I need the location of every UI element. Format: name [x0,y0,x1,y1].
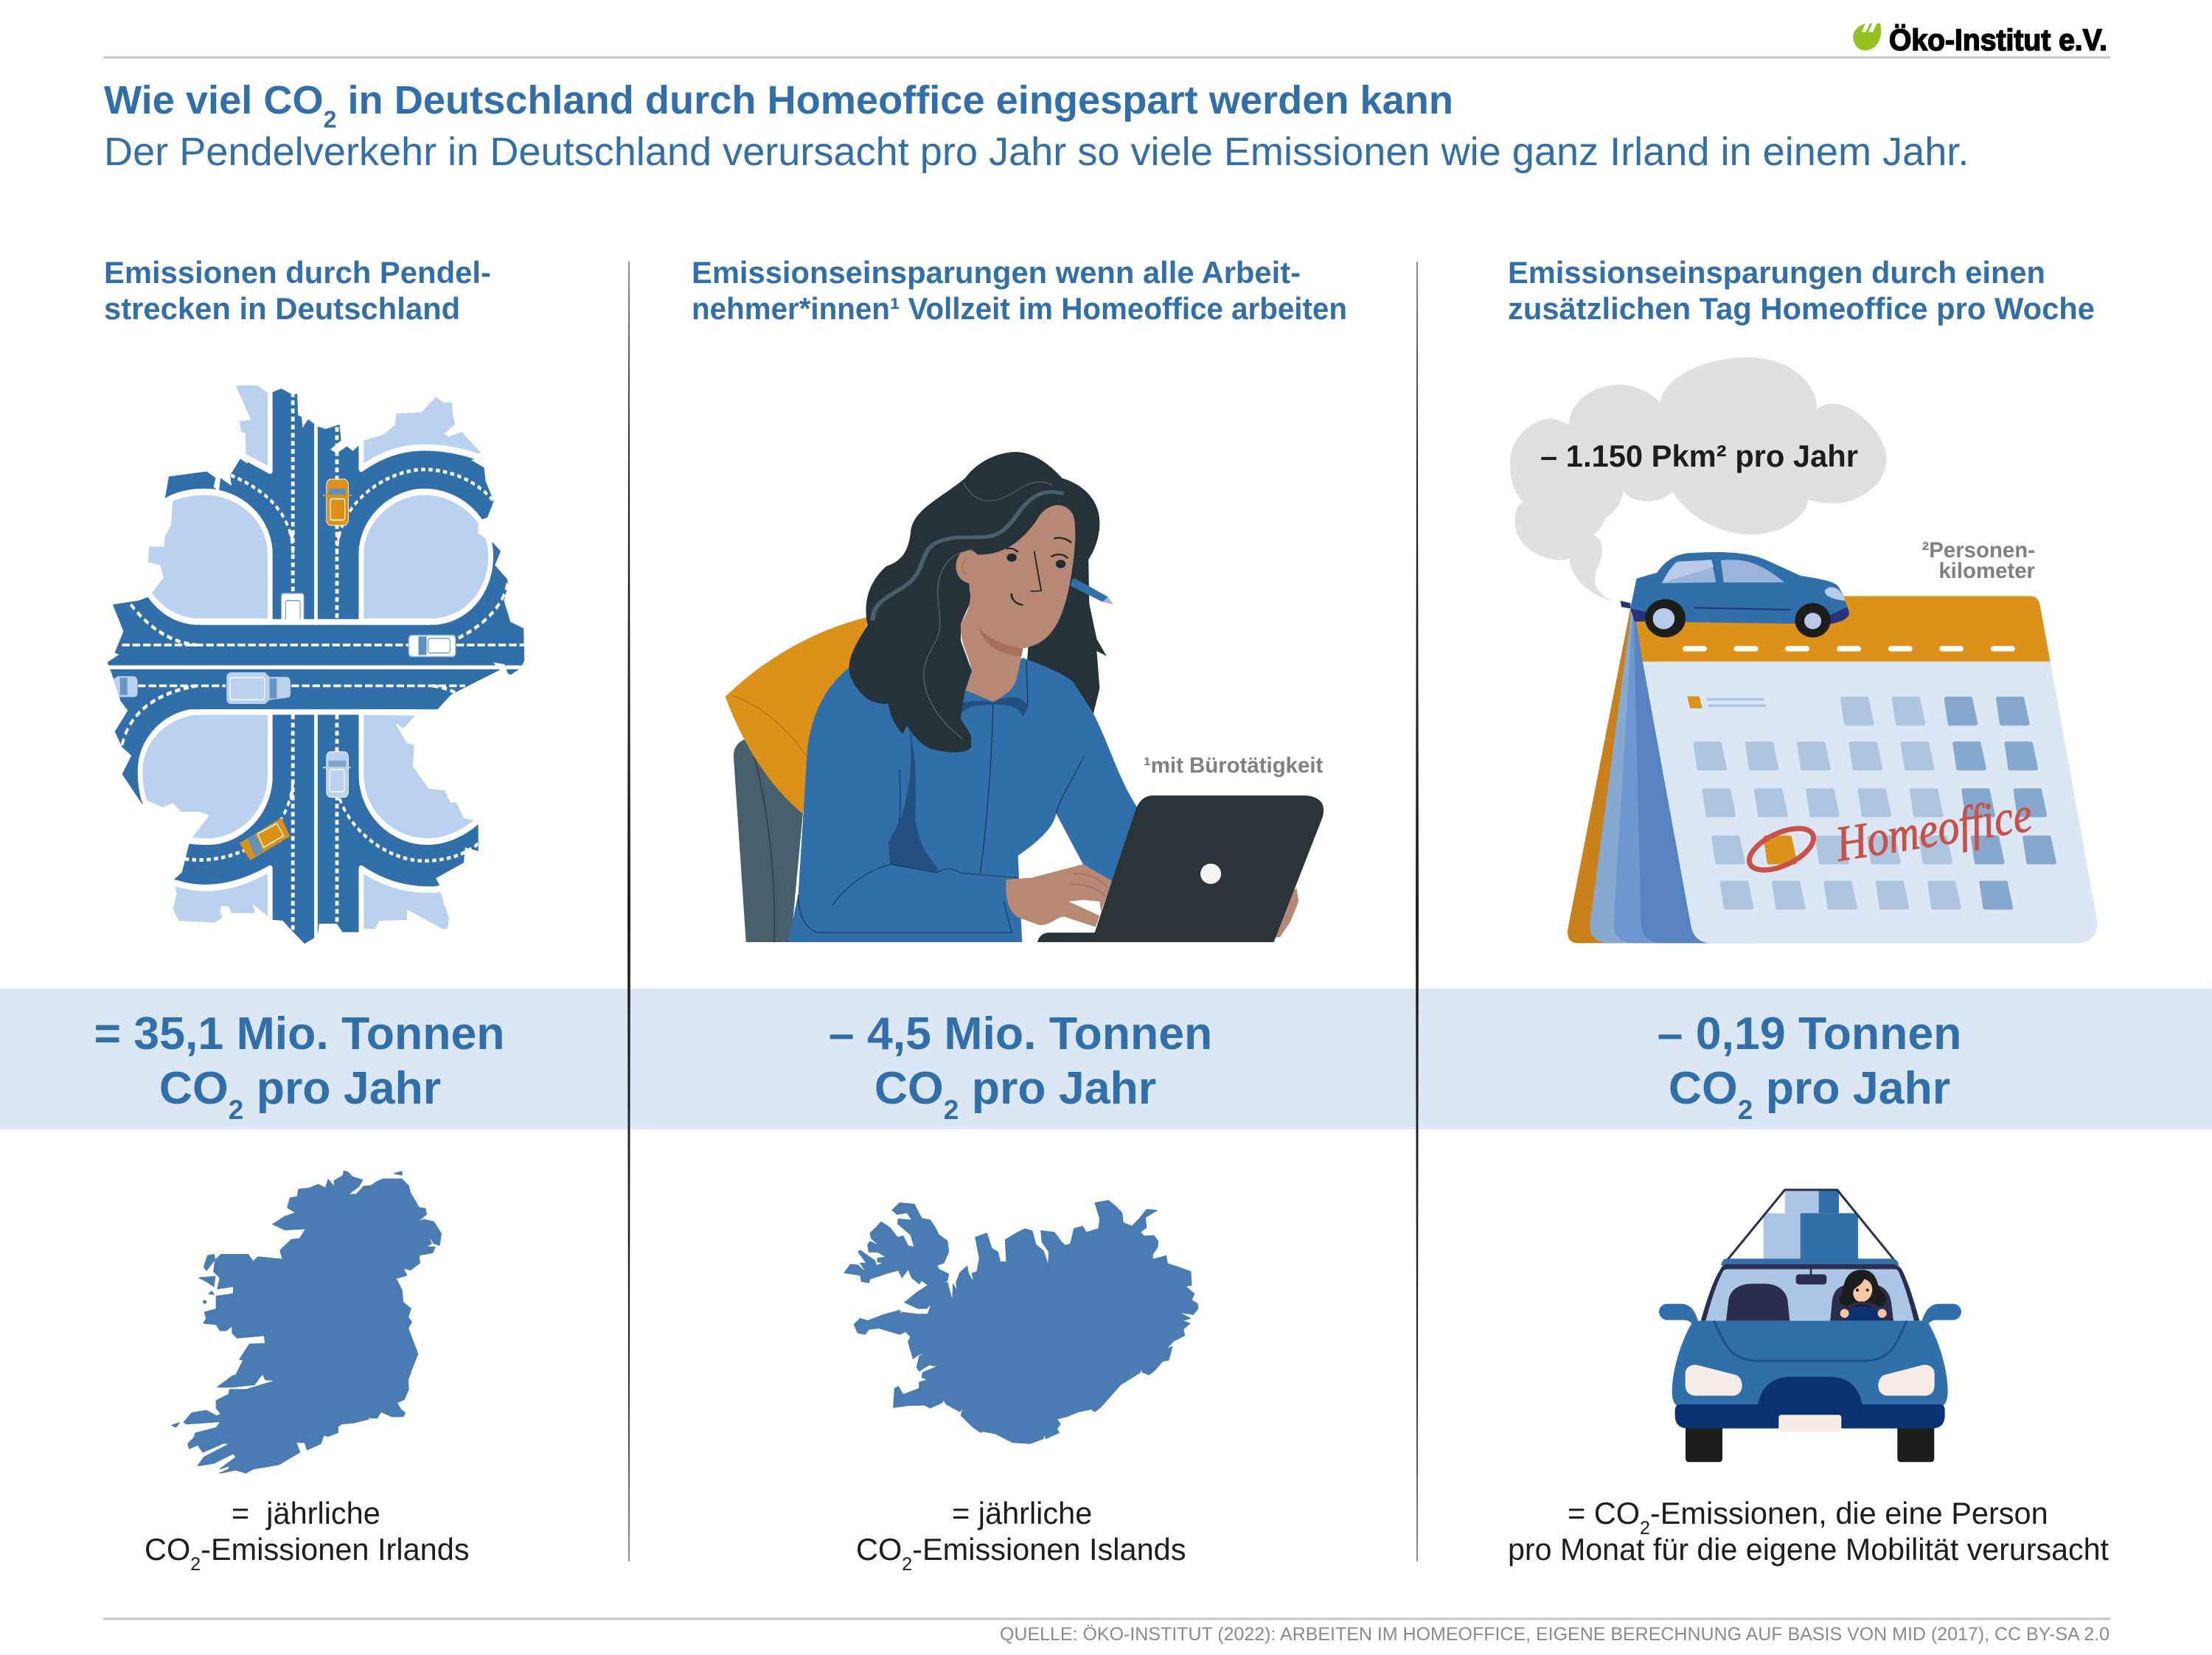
caption: Ireland: -Emissionen Irlands [201,1532,470,1567]
hair [849,452,1099,753]
value: 0,19 Tonnen: – 0,19 Tonnen [1658,1008,1961,1059]
grille [1758,1377,1862,1406]
passenger seat [1726,1283,1790,1321]
band: one extra home office day value [1419,989,2212,1129]
caption: Ireland: = jährliche [232,1496,380,1530]
value: 35,1 Mio. Tonnen: 2 [229,1095,243,1125]
calendar road markings [1686,644,2012,654]
value: 35,1 Mio. Tonnen: = 35,1 Mio. Tonnen [94,1008,505,1059]
caption: Ireland: 2 [190,1554,201,1575]
value: 0,19 Tonnen: pro Jahr [1753,1062,1950,1114]
title: Wie viel CO [104,78,324,122]
title: in Deutschland durch Homeoffice eingespart werden kann [336,78,1453,122]
band: home office full time value [630,989,1416,1129]
footnote: Personenkilometer: kilometer [1938,559,2035,583]
footnote: mit Bürotätigkeit: ¹mit Bürotätigkeit [1144,753,1324,778]
hair highlights [873,492,1063,621]
car: white car heading east [408,635,456,657]
headlights [1686,1365,1742,1396]
map: Iceland [844,1200,1198,1443]
value: 0,19 Tonnen: CO [1669,1062,1950,1125]
caption: monthly mobility emissions: -Emissionen, die eine Person [1650,1496,2048,1530]
bumper [1675,1404,1945,1429]
right hand behind laptop [1263,888,1298,938]
blouse [788,658,1139,942]
roof and windshield [1721,1258,1899,1266]
caption: monthly mobility emissions: = CO [1568,1496,2048,1539]
illustration: calendar with car and exhaust cloud [1510,358,2098,943]
source line: QUELLE: ÖKO-INSTITUT (2022): ARBEITEN IM HOMEOFFICE, EIGENE BERECHNUNG AUF BASIS VON MID (2017), CC BY-SA 2.0 [1000,1624,2110,1645]
car: light blue van heading east [226,672,291,704]
map: Ireland [172,1171,441,1473]
car body [1672,1321,1948,1407]
panel heading: nehmer*innen¹ Vollzeit im Homeoffice arbeiten [692,291,1347,326]
chair [726,617,867,942]
value: 4,5 Mio. Tonnen: CO [874,1062,1156,1125]
panel: Emissionen durch Pendelstrecken [0,255,629,1575]
cloud label: – 1.150 Pkm² pro Jahr [1540,439,1858,473]
car: white van [282,593,304,621]
mirrors [1659,1304,1698,1325]
subtitle: Der Pendelverkehr in Deutschland verursacht pro Jahr so viele Emissionen wie ganz Irland in einem Jahr. [104,130,1969,174]
caption: Iceland: 2 [902,1554,912,1575]
value: 0,19 Tonnen: 2 [1738,1095,1753,1125]
car: orange car on ramp [241,819,289,859]
car: light car heading south [323,752,351,797]
panel heading: Emissionseinsparungen wenn alle Arbeit- [692,255,1301,290]
face [956,505,1075,656]
licence plate [1778,1415,1841,1432]
caption: Iceland: = jährliche [952,1496,1092,1530]
panel heading: Emissionseinsparungen durch einen [1508,255,2045,290]
icon: green leaf logo mark [1853,24,1881,50]
caption: monthly mobility emissions: 2 [1640,1518,1650,1539]
footnote: Personenkilometer: ²Personen- [1921,538,2035,562]
car on calendar [1621,552,1849,638]
caption: monthly mobility emissions: pro Monat für die eigene Mobilität verursacht [1508,1532,2109,1567]
car: small light car at west edge [114,676,137,697]
caption: Iceland: CO [856,1532,1186,1575]
exhaust cloud [1510,358,1887,602]
value: 35,1 Mio. Tonnen: pro Jahr [243,1062,441,1114]
neck [961,624,1023,702]
band: Germany commuting emissions value [0,989,629,1129]
calendar day tiles [1695,699,2054,907]
hair behind [1027,495,1107,714]
pencil [1071,578,1113,604]
caption: Iceland: -Emissionen Islands [912,1532,1186,1567]
wheels [1686,1426,1934,1462]
driver seat and driver [1830,1269,1893,1321]
hand [1006,864,1112,927]
panel heading: strecken in Deutschland [104,291,460,326]
panel: Vollzeit im Homeoffice [630,255,1416,1575]
luggage [1728,1190,1893,1260]
illustration: woman working on laptop [726,452,1324,942]
logo wordmark: Öko-Institut e.V. [1889,23,2107,57]
panel heading: zusätzlichen Tag Homeoffice pro Woche [1508,291,2095,326]
panel heading: Emissionen durch Pendel- [104,255,491,290]
value: 4,5 Mio. Tonnen: 2 [944,1095,959,1125]
value: 35,1 Mio. Tonnen: CO [159,1062,441,1125]
value: 4,5 Mio. Tonnen: – 4,5 Mio. Tonnen [829,1008,1212,1059]
calendar pages [1568,596,2098,943]
calendar header marker [1687,697,1766,708]
car: orange car heading north [323,479,352,526]
value: 4,5 Mio. Tonnen: pro Jahr [959,1062,1156,1114]
logo: Öko-Institut e.V. [1853,23,2107,57]
laptop [1037,795,1324,942]
caption: Ireland: CO [145,1532,470,1575]
red circle around calendar day [1743,820,1820,879]
map: Germany as motorway interchange [108,385,525,944]
panel: zusätzlicher Tag Homeoffice [1419,255,2212,1567]
title: 2 [324,106,336,133]
handwritten Homeoffice: Homeoffice [1832,786,2036,872]
collar [961,697,1028,717]
illustration: car front with luggage [1659,1190,1961,1462]
